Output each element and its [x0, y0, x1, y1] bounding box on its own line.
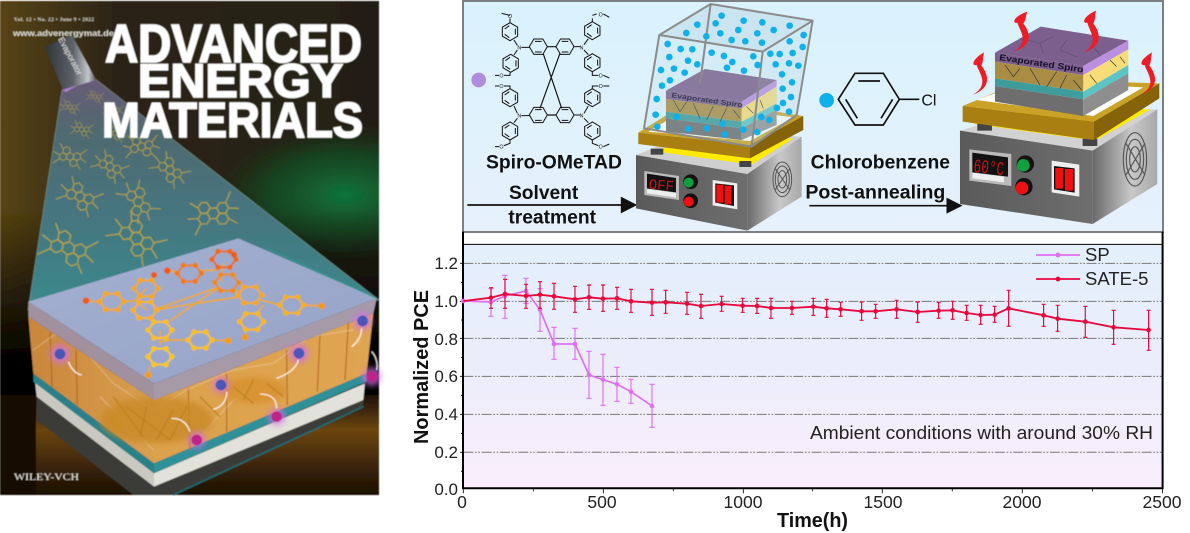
- Spiro-OMeTAD structure: O: [599, 145, 603, 151]
- evaporated spiro stack in chamber: [666, 69, 777, 140]
- x-axis tick labels: 2000: [1003, 492, 1042, 512]
- y-axis tick labels: 0.2: [434, 443, 458, 462]
- arrow: post-annealing: [809, 199, 961, 212]
- y-axis tick labels: 1.2: [434, 254, 458, 273]
- Spiro-OMeTAD structure: [495, 13, 609, 151]
- label: Solvent: Solvent: [509, 183, 579, 204]
- y-axis tick labels: 1.0: [434, 292, 458, 311]
- y-axis title: Normalized PCE: [411, 290, 433, 444]
- icon: heat arrows: [973, 11, 1155, 95]
- y-axis tick labels: 0.8: [434, 330, 458, 349]
- evaporated spiro stack: [995, 27, 1128, 116]
- x-axis tick labels: [457, 492, 1182, 512]
- panel: journal cover: [0, 0, 384, 496]
- teal rim: [267, 248, 377, 298]
- y-axis tick labels: 0.4: [434, 405, 458, 424]
- Spiro-OMeTAD structure: O: [508, 14, 512, 20]
- evaporated molecules: [35, 89, 246, 276]
- hot plate: 60 C: 60°C: [972, 156, 1005, 181]
- x-axis tick labels: 2500: [1143, 492, 1182, 512]
- cover title: [102, 14, 363, 148]
- device block: [28, 238, 381, 495]
- icon: blue dot: [819, 93, 834, 108]
- x-axis title: Time(h): [777, 510, 848, 532]
- evaporated spiro stack: Evaporated Spiro: [999, 52, 1084, 75]
- evaporated spiro stack in chamber: Evaporated Spiro: [671, 92, 743, 109]
- series: SATE-5: [463, 279, 1151, 350]
- hot plate: 60 C: [960, 79, 1159, 224]
- Spiro-OMeTAD structure: N: [517, 114, 521, 120]
- x-axis tick labels: 0: [457, 492, 467, 512]
- Spiro-OMeTAD structure: O: [499, 145, 503, 151]
- chlorobenzene structure: Cl: [921, 92, 936, 109]
- series: SP: [461, 275, 655, 427]
- label: Chlorobenzene: Chlorobenzene: [811, 152, 950, 173]
- legend: [1036, 244, 1148, 289]
- left half of scheme: [467, 4, 813, 231]
- Spiro-OMeTAD structure: O: [599, 13, 603, 19]
- label: Post-annealing: Post-annealing: [805, 183, 945, 204]
- cover title: ADVANCED: [105, 14, 362, 74]
- x-axis tick labels: 1500: [864, 492, 903, 512]
- legend: SATE-5: [1085, 268, 1148, 289]
- charge carriers: [50, 312, 381, 449]
- top surface: [28, 238, 377, 383]
- label: treatment: treatment: [508, 207, 597, 228]
- y-axis tick labels: 0.0: [434, 480, 458, 499]
- cover background: [0, 0, 380, 496]
- Spiro-OMeTAD structure: N: [517, 45, 521, 51]
- y-axis tick labels: [434, 254, 458, 499]
- Spiro-OMeTAD structure: N: [580, 45, 584, 51]
- evaporator: [45, 35, 96, 92]
- Spiro-OMeTAD structure: O: [599, 73, 603, 79]
- x-axis tick labels: 500: [587, 492, 617, 512]
- solvent chamber with chlorobenzene dots: [644, 4, 813, 147]
- right half of scheme: [805, 11, 1159, 224]
- molecule: spiro-OMeTAD on surface: [83, 249, 325, 378]
- chlorobenzene structure: [838, 73, 936, 125]
- panel: solvent treatment scheme: [463, 1, 1163, 232]
- arrow: solvent treatment: [467, 198, 635, 212]
- Spiro-OMeTAD structure: O: [599, 84, 603, 90]
- x-axis tick labels: 1000: [724, 492, 763, 512]
- cover title: MATERIALS: [102, 94, 363, 148]
- website: www.advenergymat.de: [12, 29, 115, 38]
- panel: PCE stability chart: [411, 232, 1182, 532]
- Spiro-OMeTAD structure: O: [499, 84, 503, 90]
- label: Spiro-OMeTAD: Spiro-OMeTAD: [486, 152, 622, 173]
- Spiro-OMeTAD structure: O: [499, 73, 503, 79]
- icon: purple dot: [471, 73, 486, 87]
- evaporation beam: [28, 78, 379, 310]
- annotation: ambient conditions: Ambient conditions with around 30% RH: [810, 423, 1153, 443]
- Spiro-OMeTAD structure: N: [580, 114, 584, 120]
- issue line: Vol. 12 • No. 22 • June 9 • 2022: [14, 17, 94, 23]
- cover title: ENERGY: [138, 54, 343, 107]
- hot plate: off: OFF: [648, 178, 675, 196]
- evaporator: Evaporator: [56, 35, 85, 77]
- grid lines and axes: [460, 232, 1163, 493]
- y-axis tick labels: 0.6: [434, 367, 458, 386]
- publisher: WILEY-VCH: [14, 473, 79, 483]
- hot plate: off: [636, 98, 803, 231]
- legend: SP: [1085, 244, 1110, 265]
